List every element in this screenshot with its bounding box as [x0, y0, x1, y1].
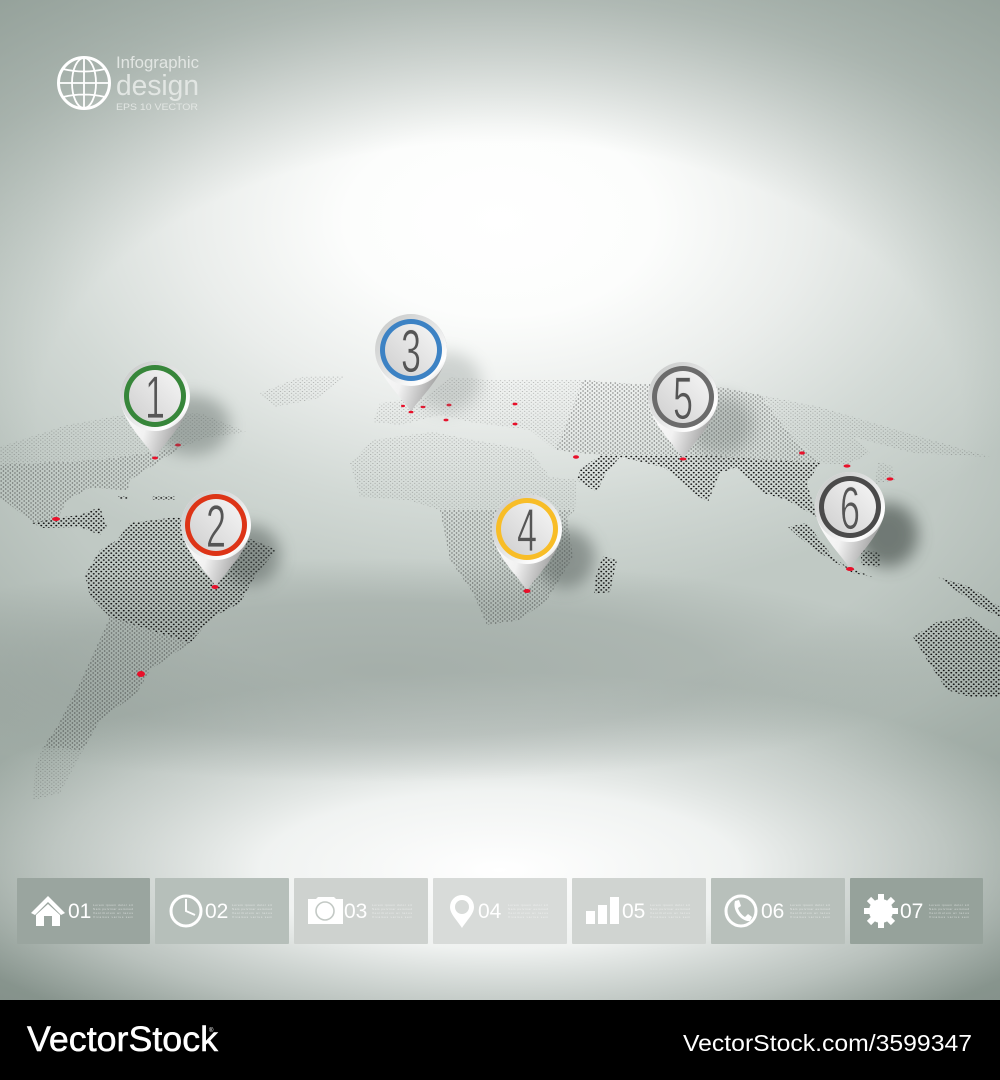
logo heading: Infographic	[116, 54, 199, 72]
map: Japan	[875, 462, 895, 484]
number 03: 03	[344, 900, 367, 923]
caption 05	[650, 903, 690, 919]
tile 05: bars	[572, 878, 706, 944]
number 5: 5	[673, 366, 693, 432]
map: Madagascar	[594, 556, 617, 594]
map: Africa	[350, 432, 577, 625]
caption 03: Vivamus varius sem	[372, 915, 412, 919]
icon: phone	[726, 896, 756, 926]
caption 06: Lorem ipsum dolor sit	[790, 903, 830, 907]
number 05: 05	[622, 900, 645, 923]
pin 6 shadow	[858, 503, 918, 567]
caption 05: Nam pulvinar euismod	[650, 907, 690, 911]
caption 04	[508, 903, 548, 919]
registered mark: ®	[209, 1027, 214, 1034]
caption 01: Vestibulum at lacus	[93, 911, 134, 915]
tile 07: gear	[850, 878, 983, 944]
watermark footer	[0, 1000, 1000, 1080]
pin 5	[648, 362, 718, 459]
caption 04: Vestibulum at lacus	[508, 911, 548, 915]
caption 07	[929, 903, 970, 919]
logo heading: design	[116, 70, 199, 102]
number 04: 04	[478, 900, 502, 923]
logo heading: EPS 10 VECTOR	[116, 102, 199, 112]
brand name: VectorStock	[27, 1020, 219, 1059]
map: North America	[0, 413, 247, 523]
pin 1 shadow	[154, 395, 230, 455]
icon: location pin	[450, 895, 474, 928]
caption 06: Vivamus varius sem	[790, 915, 830, 919]
map: Indonesia	[788, 523, 880, 577]
pin 2 shadow	[220, 525, 280, 585]
caption 03: Vestibulum at lacus	[372, 911, 412, 915]
caption 06: Vestibulum at lacus	[790, 911, 830, 915]
caption 04: Lorem ipsum dolor sit	[508, 903, 548, 907]
caption 05: Vivamus varius sem	[650, 915, 690, 919]
map: location markers	[52, 403, 894, 677]
tile 02: clock	[155, 878, 289, 944]
map: New Guinea	[938, 577, 1000, 617]
number 6: 6	[840, 476, 860, 542]
caption 03: Nam pulvinar euismod	[372, 907, 412, 911]
pin 4 shadow	[535, 528, 595, 588]
pin 5 shadow	[686, 395, 754, 455]
caption 07: Vivamus varius sem	[929, 915, 970, 919]
pin 3 shadow	[413, 352, 481, 412]
number 07: 07	[900, 900, 923, 923]
icon: bar chart	[586, 897, 619, 924]
caption 03: Lorem ipsum dolor sit	[372, 903, 412, 907]
map: Australia	[913, 617, 1000, 697]
number 2: 2	[206, 494, 226, 560]
icon: home	[31, 896, 65, 926]
icon: camera	[308, 897, 343, 924]
map: South America	[33, 517, 277, 800]
caption 05: Vestibulum at lacus	[650, 911, 690, 915]
caption 04: Vivamus varius sem	[508, 915, 548, 919]
caption 01	[93, 903, 134, 919]
number 1: 1	[145, 365, 165, 431]
caption 01: Lorem ipsum dolor sit	[93, 903, 133, 907]
number 4: 4	[517, 498, 537, 564]
caption 06: Nam pulvinar euismod	[790, 907, 830, 911]
logo	[58, 54, 199, 112]
map: Greenland	[260, 376, 345, 407]
number 01: 01	[68, 900, 91, 923]
map: Central America and Caribbean	[32, 496, 175, 535]
world map	[0, 376, 1000, 800]
caption 07: Vestibulum at lacus	[929, 911, 970, 915]
map: Eurasia	[373, 377, 990, 517]
tile bar	[17, 878, 983, 944]
caption 01: Vivamus varius sem	[93, 915, 134, 919]
caption 05: Lorem ipsum dolor sit	[650, 903, 690, 907]
pin 6	[815, 472, 885, 569]
tile 03: camera	[294, 878, 428, 944]
logo heading	[116, 54, 199, 112]
caption 03	[372, 903, 412, 919]
caption 02: Vivamus varius sem	[232, 915, 272, 919]
caption 04: Nam pulvinar euismod	[508, 907, 548, 911]
caption 07: Nam pulvinar euismod	[929, 907, 969, 911]
caption 02: Lorem ipsum dolor sit	[232, 903, 272, 907]
number 3: 3	[401, 319, 421, 385]
caption 07: Lorem ipsum dolor sit	[929, 903, 969, 907]
caption 02: Vestibulum at lacus	[232, 911, 272, 915]
icon: globe	[58, 58, 110, 108]
pin tip markers	[152, 411, 854, 593]
pin 1	[120, 361, 190, 458]
image url: VectorStock.com/3599347	[683, 1030, 972, 1056]
icon: gear	[864, 894, 898, 928]
caption 06	[790, 903, 830, 919]
pin 3	[375, 314, 447, 412]
caption 02	[232, 903, 272, 919]
tile 01: home	[17, 878, 150, 944]
number 06: 06	[761, 900, 784, 923]
pin 4	[492, 494, 562, 591]
icon: clock	[171, 896, 201, 926]
number 02: 02	[205, 900, 228, 923]
caption 02: Nam pulvinar euismod	[232, 907, 272, 911]
pin 2	[181, 490, 251, 587]
caption 01: Nam pulvinar euismod	[93, 907, 133, 911]
tile 06: phone	[711, 878, 845, 944]
tile 04: pin	[433, 878, 567, 944]
